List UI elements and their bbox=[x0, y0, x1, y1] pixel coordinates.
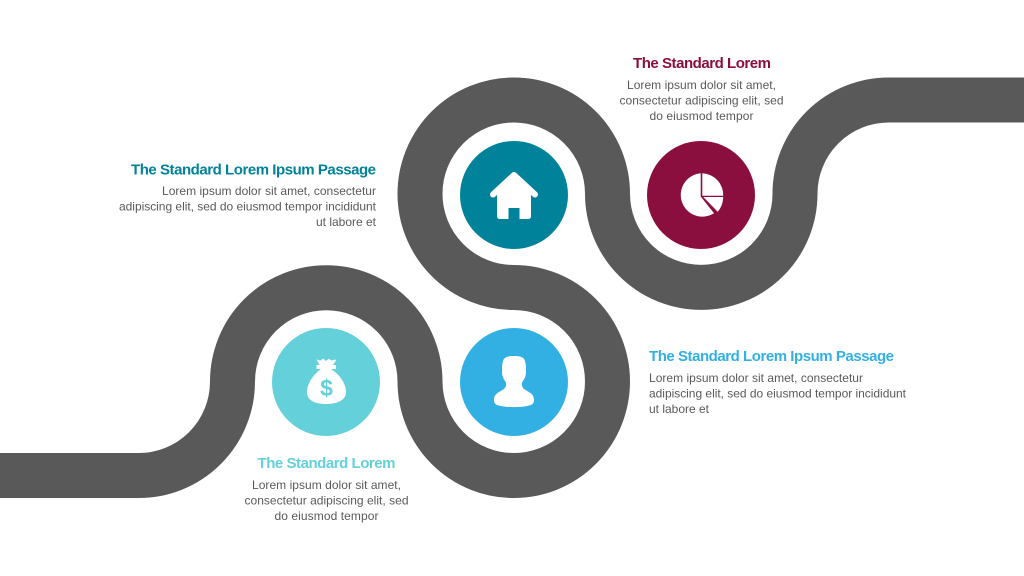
body text: consectetur adipiscing elit, sed bbox=[244, 494, 408, 508]
body text: Lorem ipsum dolor sit amet, bbox=[627, 78, 776, 92]
step 1: money bbox=[244, 328, 408, 523]
body text bbox=[620, 78, 784, 123]
body text: do eiusmod tempor bbox=[650, 109, 754, 123]
circle: money bbox=[272, 328, 380, 436]
body text bbox=[244, 478, 408, 523]
winding road bbox=[0, 100, 1024, 476]
circle: chart bbox=[647, 141, 755, 249]
step 4: chart bbox=[620, 55, 784, 249]
body text: consectetur adipiscing elit, sed bbox=[620, 94, 784, 108]
circle: home bbox=[460, 141, 568, 249]
heading: The Standard Lorem Ipsum Passage bbox=[649, 348, 894, 365]
icon: person bbox=[494, 356, 534, 407]
body text: adipiscing elit, sed do eiusmod tempor incididunt bbox=[649, 386, 907, 400]
dollar sign: $ bbox=[320, 375, 333, 401]
body text: Lorem ipsum dolor sit amet, consectetur bbox=[649, 371, 863, 385]
heading: The Standard Lorem bbox=[633, 55, 771, 72]
icon: house bbox=[493, 175, 535, 219]
body text bbox=[649, 371, 907, 416]
heading: The Standard Lorem Ipsum Passage bbox=[131, 162, 376, 178]
circle: person bbox=[460, 328, 568, 436]
heading: The Standard Lorem bbox=[258, 455, 396, 472]
icon: pie chart bbox=[681, 173, 723, 217]
body text: do eiusmod tempor bbox=[274, 509, 378, 523]
body text: Lorem ipsum dolor sit amet, consectetur bbox=[162, 184, 376, 198]
icon: money bag bbox=[307, 358, 346, 404]
body text: ut labore et bbox=[649, 402, 710, 416]
body text: ut labore et bbox=[316, 215, 377, 229]
body text: Lorem ipsum dolor sit amet, bbox=[252, 478, 401, 492]
step 2: person bbox=[460, 328, 907, 436]
body text bbox=[119, 184, 377, 229]
step 3: home bbox=[119, 141, 568, 249]
body text: adipiscing elit, sed do eiusmod tempor incididunt bbox=[119, 200, 377, 214]
